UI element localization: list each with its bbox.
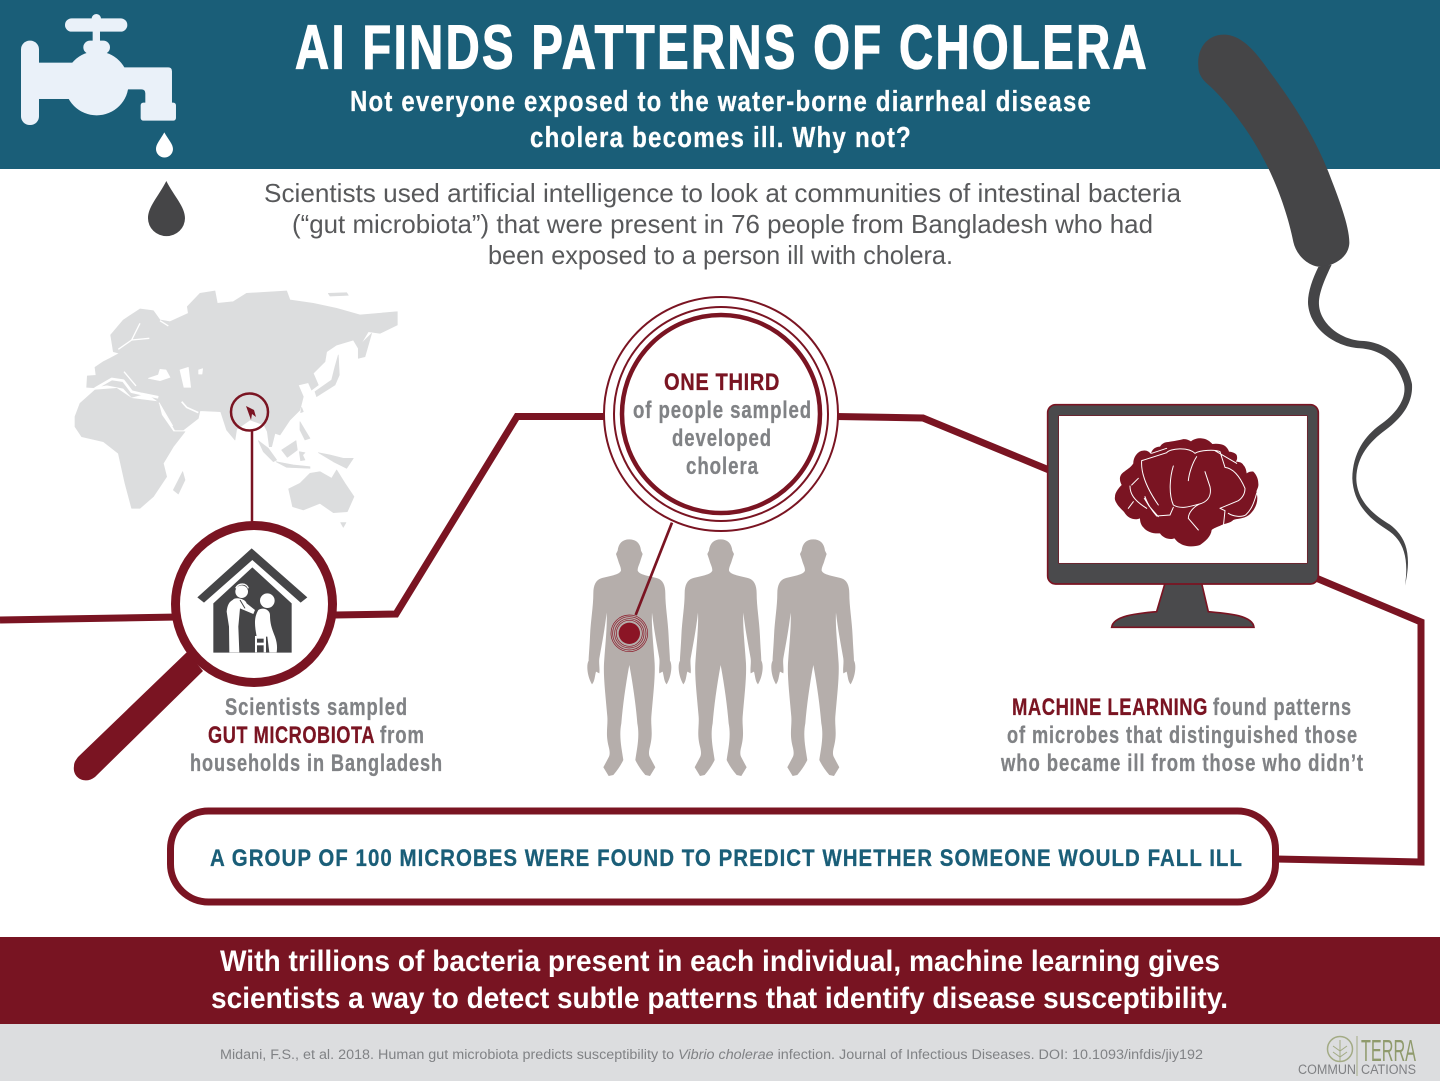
callout text: one third: of people sampled [633,397,812,424]
icon: brain [1115,438,1258,546]
caption: machine learning: found patterns [1213,694,1352,721]
caption: machine learning [1000,694,1364,777]
conclusion band [0,937,1440,1024]
caption: sampling [190,694,443,777]
intro text [264,178,1182,270]
result callout box [170,811,1276,902]
result callout box: A GROUP OF 100 MICROBES WERE FOUND TO PREDICT WHETHER SOMEONE WOULD FALL ILL [210,845,1243,872]
person 2 [679,539,763,776]
conclusion band: With trillions of bacteria present in each individual, machine learning gives [220,945,1220,978]
subtitle [350,86,1092,154]
map: New Guinea [318,453,353,468]
map: Persian Gulf [182,402,198,413]
monitor stand [1112,583,1254,627]
map: White Sea [160,321,168,326]
map: Java [276,462,310,468]
monitor frame [1048,405,1318,584]
map: Japan [315,355,339,397]
caption: sampling: Scientists sampled [225,694,408,721]
icon: dark water drop [148,181,185,236]
icon: vibrio cholerae bacterium [1198,35,1412,586]
map: Mediterranean [95,379,158,397]
caption: machine learning: MACHINE LEARNING [1012,694,1208,721]
callout text: one third: cholera [686,453,759,480]
title: AI FINDS PATTERNS OF CHOLERA [295,14,1149,82]
world map [75,291,397,527]
subtitle: Not everyone exposed to the water-borne diarrheal disease [350,86,1092,118]
icon: house call [197,548,307,653]
caption: sampling: from [380,722,425,749]
callout text: one third: developed [672,425,772,452]
map: Red Sea [159,403,173,426]
callout text: one third: ONE THIRD [664,369,780,396]
red route line [0,416,1421,862]
logo: Terra Communications: CATIONS [1361,1062,1416,1077]
map: Borneo [282,441,297,457]
intro text: (“gut microbiota”) that were present in 76 people from Bangladesh who had [292,209,1153,239]
intro text: Scientists used artificial intelligence to look at communities of intestinal bacteria [264,178,1182,208]
person 3 [771,539,855,776]
header band [0,0,1440,169]
map: Novaya Zemlya [328,293,348,296]
logo: Terra Communications [1298,1033,1416,1077]
intro text: been exposed to a person ill with cholera. [488,240,953,270]
map: Adriatic [124,372,136,386]
conclusion band: scientists a way to detect subtle patterns that identify disease susceptibility. [211,982,1228,1015]
icon: faucet [21,14,176,157]
one third circle [604,297,838,531]
map: Sulawesi [299,452,305,461]
map: Taiwan [301,407,303,413]
map: Tasmania [341,523,346,527]
map: Kamchatka [358,333,372,358]
map: Philippines [300,422,310,440]
map: Africa [75,388,185,508]
callout text: one third [633,369,812,480]
map: Aral Sea [199,369,203,374]
logo: Terra Communications: COMMUN [1298,1062,1356,1077]
map: Australia [289,470,354,513]
monitor screen [1059,416,1307,563]
map location marker [231,394,268,525]
map: Sumatra [258,441,277,462]
footer band [0,1024,1440,1081]
caption: sampling: GUT MICROBIOTA [208,722,375,749]
caption: sampling: households in Bangladesh [190,750,443,777]
map: Caspian Sea [180,367,191,387]
gut target and pointer [611,523,672,652]
citation: Midani, F.S., et al. 2018. Human gut microbiota predicts susceptibility to Vibrio cholerae infection. Journal of Infectious Diseases. DOI: 10.1093/infdis/jiy192 [220,1047,1203,1062]
subtitle: cholera becomes ill. Why not? [530,122,912,154]
monitor [1048,405,1318,627]
map: Eurasia [87,291,397,447]
magnifying glass [74,526,333,780]
map: Madagascar [173,472,185,494]
map: Black Sea [148,369,170,381]
three human silhouettes [587,523,855,776]
map: Baltic Sea [118,323,149,349]
person 1 [587,539,671,776]
